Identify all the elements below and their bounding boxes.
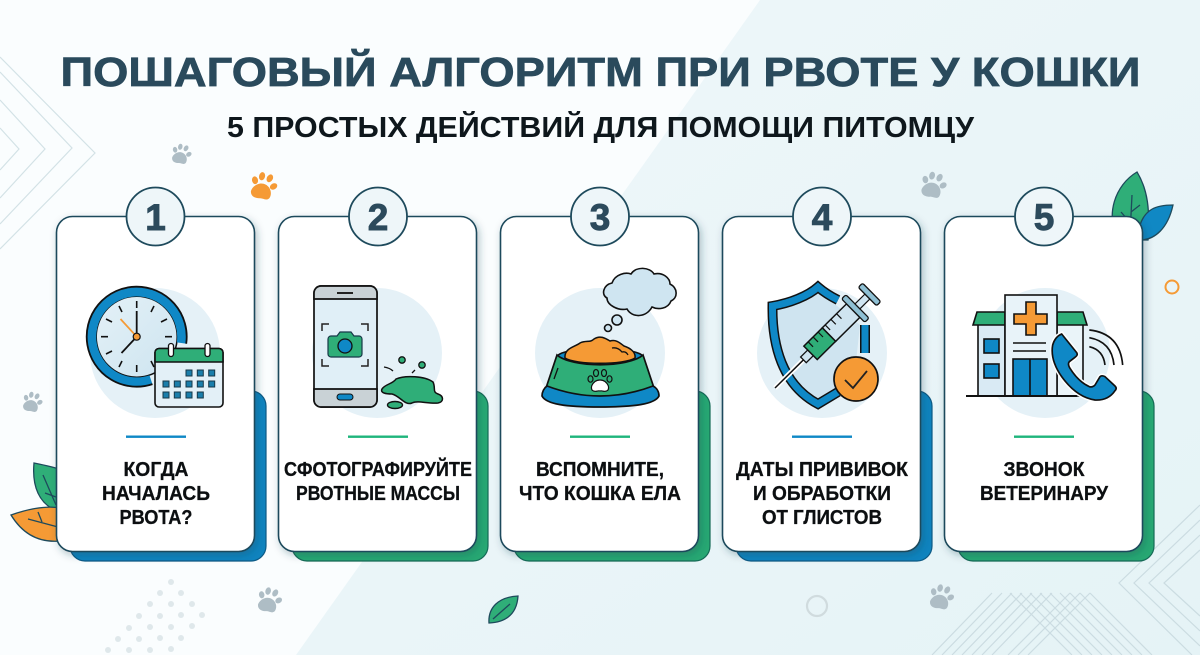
step text: ВСПОМНИТЕ, xyxy=(536,459,664,481)
number badge: 5 xyxy=(1034,197,1054,238)
card back: green xyxy=(514,391,710,561)
icon backdrop xyxy=(535,288,665,418)
number badge xyxy=(1015,188,1073,246)
gray ring xyxy=(807,596,827,616)
number badge: 3 xyxy=(590,197,610,238)
card body xyxy=(500,216,698,552)
panel: step 1 xyxy=(56,188,266,561)
panel: step 2 xyxy=(278,188,488,561)
card back: blue xyxy=(736,391,932,561)
panel: step 5 xyxy=(944,188,1154,561)
panel: step 4 xyxy=(722,188,932,561)
card back: green xyxy=(292,391,488,561)
divider xyxy=(792,436,852,438)
panel: step 3 xyxy=(500,188,710,561)
divider xyxy=(348,436,408,438)
number badge xyxy=(126,188,184,246)
icon: telephone handset xyxy=(1052,330,1123,400)
step text: ДАТЫ ПРИВИВОК xyxy=(736,459,909,481)
icon: hospital xyxy=(966,295,1087,396)
step text xyxy=(519,459,681,505)
card back: green xyxy=(958,391,1154,561)
icon: gray paw left xyxy=(20,389,46,414)
number badge: 1 xyxy=(145,197,166,238)
icon: food bowl xyxy=(542,337,659,407)
number badge xyxy=(793,188,851,246)
step text: ЗВОНОК xyxy=(1004,459,1085,481)
step text xyxy=(980,459,1109,505)
icon: phone with camera xyxy=(314,286,377,407)
icon backdrop xyxy=(312,288,442,418)
icon: thought cloud xyxy=(604,268,676,332)
icon backdrop xyxy=(90,288,220,418)
card body xyxy=(722,216,920,552)
step text: РВОТА? xyxy=(120,507,192,529)
icon: calendar xyxy=(155,344,223,407)
step text: НАЧАЛАСЬ xyxy=(102,483,210,505)
subtitle: 5 ПРОСТЫХ ДЕЙСТВИЙ ДЛЯ ПОМОЩИ ПИТОМЦУ xyxy=(227,111,974,144)
icon: gray paw xyxy=(169,141,195,166)
step text xyxy=(284,457,472,505)
icon backdrop xyxy=(757,288,887,418)
title: ПОШАГОВЫЙ АЛГОРИТМ ПРИ РВОТЕ У КОШКИ xyxy=(60,49,1140,95)
divider xyxy=(570,436,630,438)
icon: leaf bottom center xyxy=(489,596,518,623)
divider xyxy=(126,436,186,438)
orange ring xyxy=(1166,280,1178,294)
icon: gray paw bottom right xyxy=(926,581,958,612)
icon backdrop xyxy=(980,288,1110,418)
step text: ВЕТЕРИНАРУ xyxy=(980,483,1109,505)
card body xyxy=(56,216,254,552)
icon: gray paw bottom xyxy=(254,584,286,615)
icon: leaves top right xyxy=(1112,172,1173,240)
step text: ЧТО КОШКА ЕЛА xyxy=(519,483,681,505)
icon: clock xyxy=(87,287,187,387)
step text: И ОБРАБОТКИ xyxy=(753,483,891,505)
step text xyxy=(736,459,909,529)
icon: orange check badge xyxy=(834,357,878,401)
step text: РВОТНЫЕ МАССЫ xyxy=(296,483,460,505)
decorative chevrons top left xyxy=(0,57,95,249)
card body xyxy=(278,216,476,552)
decorative dots bottom left xyxy=(105,579,205,653)
step text: ОТ ГЛИСТОВ xyxy=(762,507,882,529)
divider xyxy=(1014,436,1074,438)
card body xyxy=(944,216,1142,552)
icon: shield xyxy=(772,287,865,404)
number badge xyxy=(349,188,407,246)
number badge: 2 xyxy=(368,197,388,238)
card back: blue xyxy=(70,391,266,561)
icon: vomit puddle xyxy=(382,357,442,408)
icon: syringe xyxy=(763,281,883,400)
step text: СФОТОГРАФИРУЙТЕ xyxy=(284,457,472,481)
icon: gray paw top right xyxy=(917,169,951,201)
icon: orange paw xyxy=(246,169,281,203)
number badge: 4 xyxy=(812,197,833,238)
icon: leaves bottom left xyxy=(11,463,62,541)
number badge xyxy=(571,188,629,246)
step text: КОГДА xyxy=(124,459,188,481)
step text xyxy=(102,459,210,529)
decorative lines bottom right xyxy=(932,505,1200,655)
